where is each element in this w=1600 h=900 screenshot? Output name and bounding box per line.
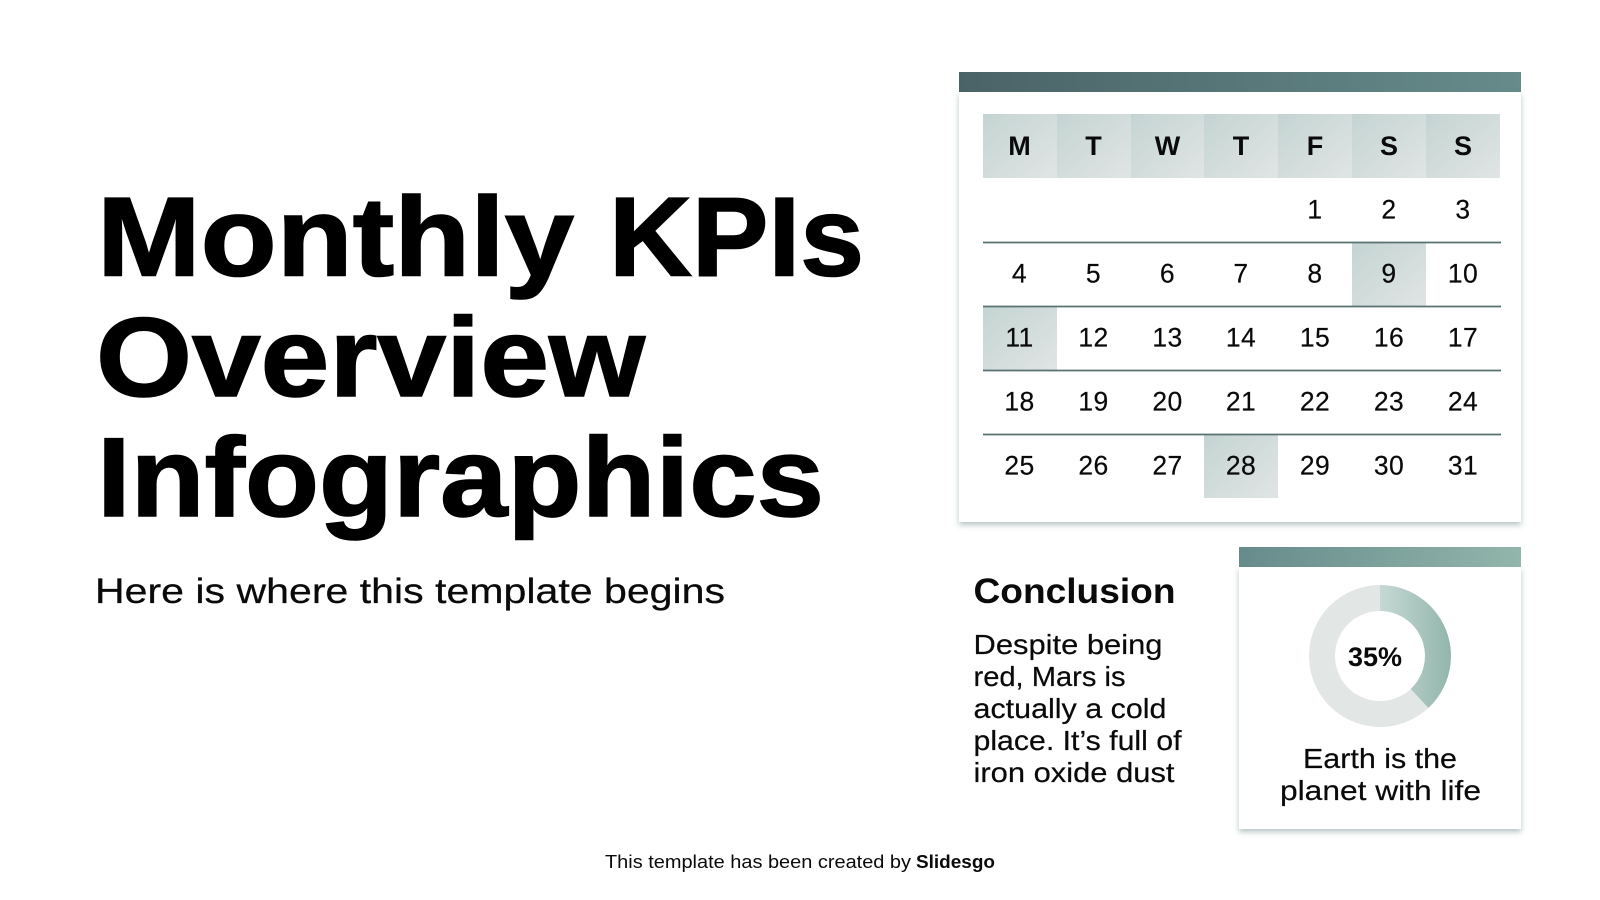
title: KPIs xyxy=(609,174,864,300)
panel: calendar xyxy=(959,72,1521,522)
conclusion body text: Despite being xyxy=(974,629,1162,660)
title xyxy=(96,174,864,540)
weekday labels: W xyxy=(1155,131,1181,161)
calendar dates: 11 xyxy=(1005,322,1034,352)
donut chart xyxy=(1322,585,1451,714)
donut card header bar xyxy=(1239,547,1521,567)
calendar dates: 27 xyxy=(1152,450,1183,480)
calendar dates: 21 xyxy=(1226,386,1256,416)
calendar dates: 17 xyxy=(1448,322,1478,352)
calendar dates: 19 xyxy=(1078,386,1109,416)
title: Infographics xyxy=(97,415,824,540)
conclusion body text: actually a cold xyxy=(974,693,1166,724)
title: Overview xyxy=(96,295,646,420)
calendar dates: 28 xyxy=(1226,450,1256,480)
weekday header cells xyxy=(983,114,1500,178)
donut caption: Earth is the xyxy=(1303,743,1457,774)
panel: conclusion xyxy=(974,572,1182,788)
calendar dates: 12 xyxy=(1078,322,1109,352)
calendar dates: 15 xyxy=(1300,322,1330,352)
conclusion body text: red, Mars is xyxy=(974,661,1126,692)
conclusion body text: place. It’s full of xyxy=(974,725,1182,756)
weekday labels xyxy=(1008,131,1472,161)
donut card background xyxy=(1239,567,1521,829)
calendar dates: 16 xyxy=(1374,322,1404,352)
donut caption: planet with life xyxy=(1280,775,1481,806)
calendar dates: 25 xyxy=(1004,450,1035,480)
footer credit: This template has been created by xyxy=(605,852,911,872)
highlighted dates xyxy=(983,243,1426,498)
weekday labels: F xyxy=(1307,131,1323,161)
donut caption xyxy=(1280,743,1481,806)
calendar dates: 1 xyxy=(1307,194,1323,224)
calendar dates: 22 xyxy=(1300,386,1330,416)
footer credit: Slidesgo xyxy=(916,852,995,872)
calendar dates: 9 xyxy=(1381,258,1397,288)
calendar dates xyxy=(1004,194,1478,480)
row divider lines xyxy=(983,242,1501,434)
donut value: 35% xyxy=(1348,642,1402,672)
calendar dates: 4 xyxy=(1012,258,1027,288)
calendar dates: 10 xyxy=(1448,258,1478,288)
conclusion heading: Conclusion xyxy=(974,572,1176,611)
calendar dates: 2 xyxy=(1381,194,1397,224)
weekday labels: S xyxy=(1380,131,1398,161)
calendar dates: 31 xyxy=(1448,450,1478,480)
conclusion body text xyxy=(974,629,1182,788)
calendar dates: 23 xyxy=(1374,386,1404,416)
calendar dates: 5 xyxy=(1086,258,1101,288)
calendar dates: 14 xyxy=(1226,322,1256,352)
subtitle: Here is where this template begins xyxy=(95,572,725,611)
calendar dates: 3 xyxy=(1455,194,1471,224)
calendar dates: 26 xyxy=(1078,450,1109,480)
calendar card background xyxy=(959,92,1521,522)
calendar dates: 29 xyxy=(1300,450,1330,480)
title: Monthly xyxy=(97,174,574,300)
conclusion body text: iron oxide dust xyxy=(974,757,1175,788)
weekday labels: M xyxy=(1008,131,1031,161)
weekday labels: T xyxy=(1233,131,1250,161)
calendar dates: 8 xyxy=(1307,258,1323,288)
calendar dates: 7 xyxy=(1233,258,1249,288)
weekday labels: T xyxy=(1085,131,1102,161)
calendar dates: 30 xyxy=(1374,450,1404,480)
calendar dates: 6 xyxy=(1160,258,1175,288)
calendar dates: 18 xyxy=(1004,386,1035,416)
calendar dates: 24 xyxy=(1448,386,1478,416)
calendar dates: 20 xyxy=(1152,386,1183,416)
weekday labels: S xyxy=(1454,131,1472,161)
panel: donut chart card xyxy=(1239,547,1521,829)
calendar header bar xyxy=(959,72,1521,92)
calendar dates: 13 xyxy=(1152,322,1183,352)
